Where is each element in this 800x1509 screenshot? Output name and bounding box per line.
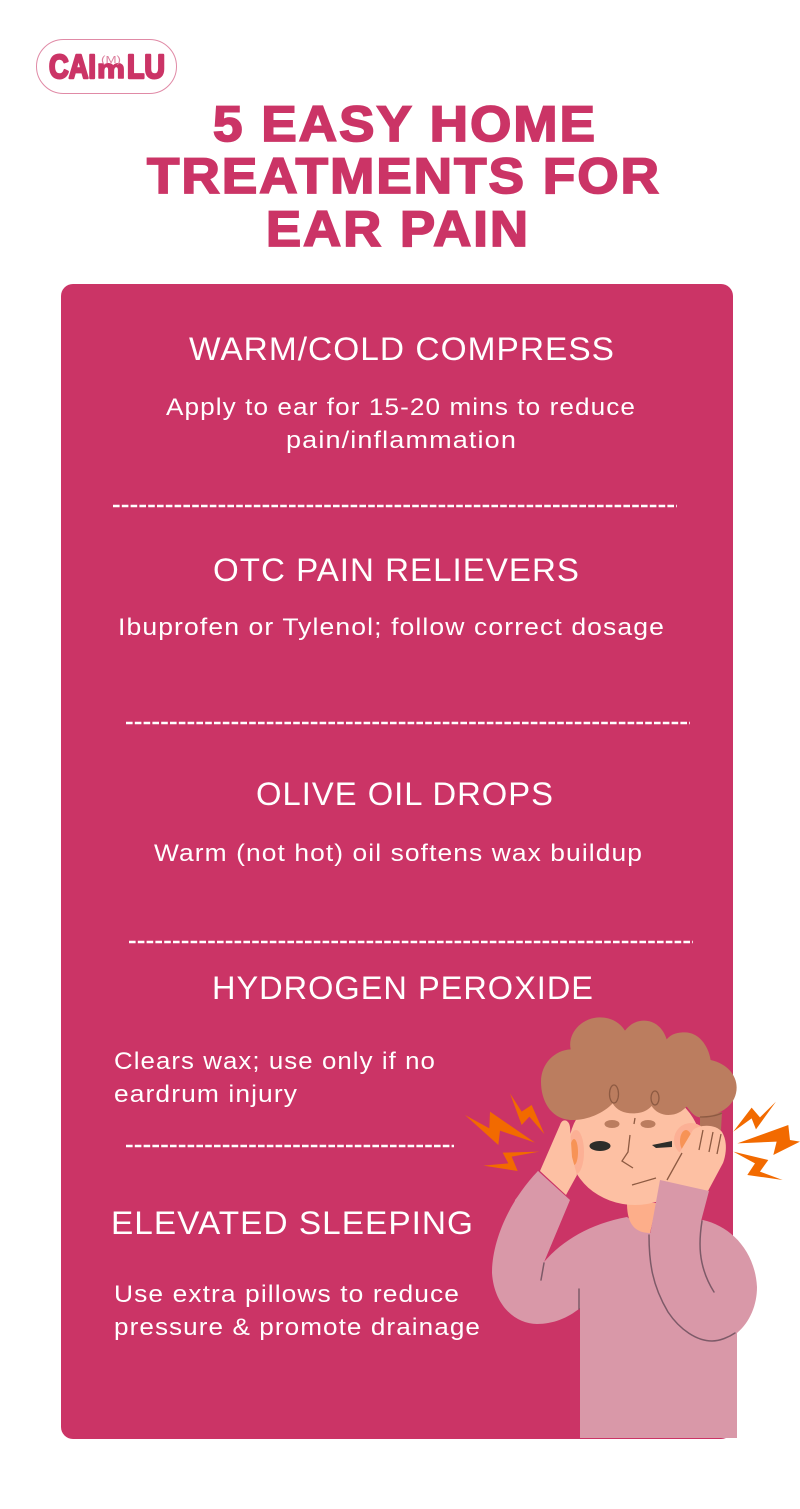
treatment 1: warm/cold compress: WARM/COLD COMPRESS [189, 331, 615, 367]
face [569, 1087, 701, 1205]
illustration: person with ear pain [465, 1017, 800, 1438]
hands [540, 1120, 726, 1195]
title [147, 96, 661, 257]
logo: Calm Lu pill: (M) [101, 55, 121, 66]
treatment 5: elevated sleeping [111, 1205, 481, 1341]
sleeve cuffs [510, 1171, 709, 1262]
body and sweater [492, 1171, 757, 1438]
facial features [590, 1118, 672, 1185]
sweater fold lines [541, 1221, 735, 1341]
treatment 4: hydrogen peroxide [114, 970, 594, 1108]
treatment 3: olive oil drops: Warm (not hot) oil softens wax buildup [154, 840, 643, 867]
treatment 5: elevated sleeping: Use extra pillows to reduce [114, 1281, 460, 1308]
treatment 4: hydrogen peroxide: HYDROGEN PEROXIDE [212, 970, 594, 1006]
logo: Calm Lu pill: m [97, 54, 125, 84]
title: EAR PAIN [266, 201, 530, 257]
treatment 2: OTC pain relievers [118, 552, 665, 641]
neck [627, 1203, 657, 1233]
treatment 3: olive oil drops: OLIVE OIL DROPS [256, 776, 554, 812]
treatment 1: warm/cold compress: pain/inflammation [286, 427, 517, 454]
treatment 1: warm/cold compress: Apply to ear for 15-20 mins to reduce [166, 394, 636, 421]
finger lines [667, 1130, 721, 1180]
treatment 3: olive oil drops [154, 776, 643, 867]
pain bolts [465, 1093, 800, 1180]
title: 5 EASY HOME [213, 96, 597, 152]
ear pain glow [568, 1123, 708, 1174]
hair back [700, 1112, 722, 1130]
treatment 4: hydrogen peroxide: eardrum injury [114, 1081, 298, 1108]
treatment 5: elevated sleeping: pressure & promote drainage [114, 1314, 481, 1341]
logo: Calm Lu pill [36, 40, 176, 94]
logo: Calm Lu pill: CAI [49, 48, 96, 85]
logo: Calm Lu pill: LU [127, 48, 165, 85]
hair curls [610, 1085, 722, 1117]
treatment 2: OTC pain relievers: OTC PAIN RELIEVERS [213, 552, 580, 588]
title: TREATMENTS FOR [147, 148, 661, 204]
hair [541, 1017, 737, 1120]
treatment 2: OTC pain relievers: Ibuprofen or Tylenol; follow correct dosage [118, 614, 665, 641]
treatment 1: warm/cold compress [166, 331, 636, 454]
panel: treatments background [61, 284, 733, 1439]
treatment 4: hydrogen peroxide: Clears wax; use only if no [114, 1048, 436, 1075]
treatment 5: elevated sleeping: ELEVATED SLEEPING [111, 1205, 474, 1241]
